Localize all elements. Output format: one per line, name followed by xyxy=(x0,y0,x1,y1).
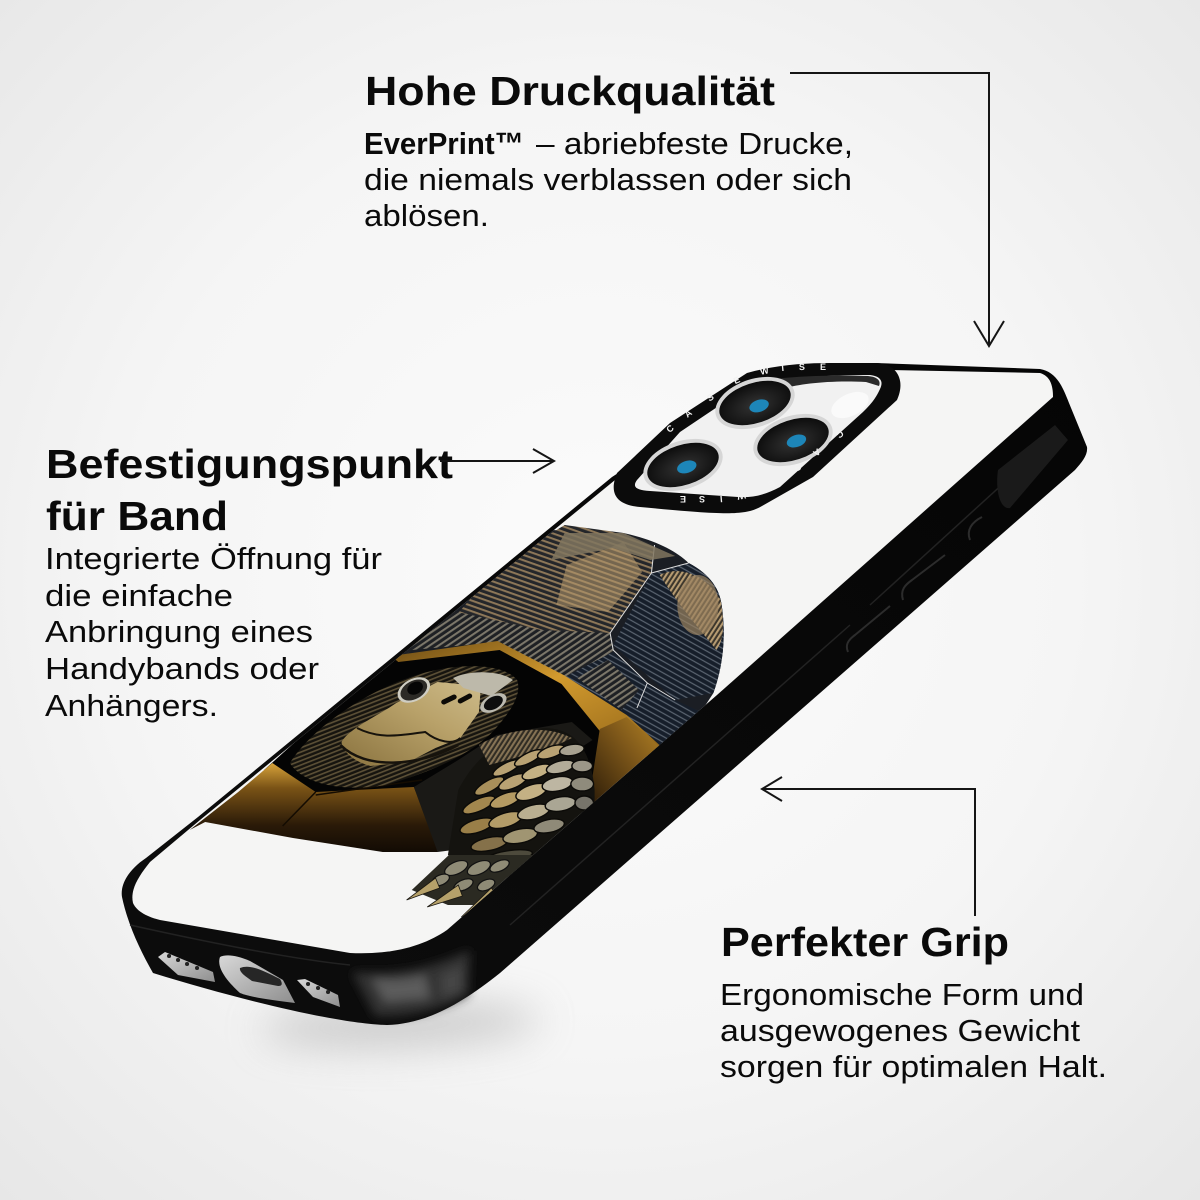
camera ring xyxy=(614,363,900,513)
ring lettering bottom: E xyxy=(680,494,686,504)
ring lettering top: E xyxy=(732,374,742,386)
text: print quality: EverPrint™ xyxy=(364,126,524,161)
heading: print quality: Hohe Druckqualität xyxy=(365,68,775,114)
turtle head xyxy=(290,666,518,788)
text: print quality xyxy=(364,126,853,233)
corner gloss xyxy=(352,950,470,1016)
ring lettering top xyxy=(664,362,826,435)
turtle right eye xyxy=(480,693,507,713)
lens left xyxy=(637,430,729,500)
neck xyxy=(414,722,593,852)
text: strap attachment: Anhängers. xyxy=(45,688,218,723)
text: grip xyxy=(720,977,1107,1084)
ring lettering top: E xyxy=(820,362,826,372)
camera window xyxy=(635,375,882,497)
lens top xyxy=(709,368,801,438)
ring lettering bottom: W xyxy=(736,490,747,502)
ring lettering bottom: E xyxy=(766,478,776,490)
turtle shell xyxy=(386,525,724,760)
ring lettering top: A xyxy=(683,407,694,420)
back plate xyxy=(132,370,1053,953)
heading: grip: Perfekter Grip xyxy=(721,919,1009,965)
ring lettering top: C xyxy=(664,422,676,435)
ring lettering top: W xyxy=(759,365,770,377)
text: grip: Ergonomische Form und xyxy=(720,977,1084,1012)
charging port xyxy=(219,955,295,1003)
plastron xyxy=(190,763,438,852)
ring lettering bottom: I xyxy=(720,494,723,504)
side sheen lines xyxy=(130,450,1040,965)
ring lettering bottom: A xyxy=(811,446,822,459)
text: strap attachment: die einfache xyxy=(45,578,233,613)
text: strap attachment: Anbringung eines xyxy=(45,614,313,649)
heading: strap attachment: Befestigungspunkt xyxy=(46,441,453,487)
turtle nostrils xyxy=(444,696,470,702)
cavity under shell xyxy=(264,645,608,815)
ring lettering top: I xyxy=(781,363,784,373)
arrow: grip xyxy=(762,777,975,916)
side buttons xyxy=(847,517,982,652)
side switch flap xyxy=(997,425,1068,508)
phone drop shadow xyxy=(259,998,541,1052)
camera island xyxy=(614,362,900,513)
shell gold rim xyxy=(391,641,665,764)
text: grip: ausgewogenes Gewicht xyxy=(720,1013,1080,1048)
heading: strap attachment: für Band xyxy=(46,493,228,539)
ring lettering bottom xyxy=(680,428,846,504)
front leg scales xyxy=(448,728,595,880)
ring lettering top: S xyxy=(799,362,805,372)
ring lettering bottom: C xyxy=(834,428,846,441)
heading: strap attachment xyxy=(46,441,453,539)
left speaker port xyxy=(158,952,215,982)
text: strap attachment: Integrierte Öffnung für xyxy=(45,541,382,576)
callout: print quality xyxy=(364,68,853,233)
text: print quality: die niemals verblassen oder sich xyxy=(364,162,852,197)
text: strap attachment: Handybands oder xyxy=(45,651,319,686)
case body xyxy=(122,363,1087,1025)
camera window shadow xyxy=(760,376,880,388)
arrow: print quality xyxy=(790,73,1004,346)
ring lettering bottom: S xyxy=(792,462,803,473)
text: grip: sorgen für optimalen Halt. xyxy=(720,1049,1107,1084)
right speaker port xyxy=(297,979,340,1007)
text: print quality: – abriebfeste Drucke, xyxy=(536,126,853,161)
callout: strap attachment xyxy=(45,441,453,723)
turtle left eye xyxy=(398,677,430,703)
shell lower rim xyxy=(592,717,658,802)
ring lettering bottom: S xyxy=(699,494,705,504)
flash xyxy=(827,387,873,423)
callout: grip xyxy=(720,919,1107,1084)
text: strap attachment xyxy=(45,541,382,723)
ring lettering top: S xyxy=(705,392,716,403)
lens right xyxy=(747,405,839,475)
text: print quality: ablösen. xyxy=(364,198,489,233)
arrow: strap attachment xyxy=(440,449,554,473)
turtle foot and claws xyxy=(407,855,536,917)
turtle artwork xyxy=(190,525,724,917)
phone case illustration xyxy=(122,362,1087,1025)
